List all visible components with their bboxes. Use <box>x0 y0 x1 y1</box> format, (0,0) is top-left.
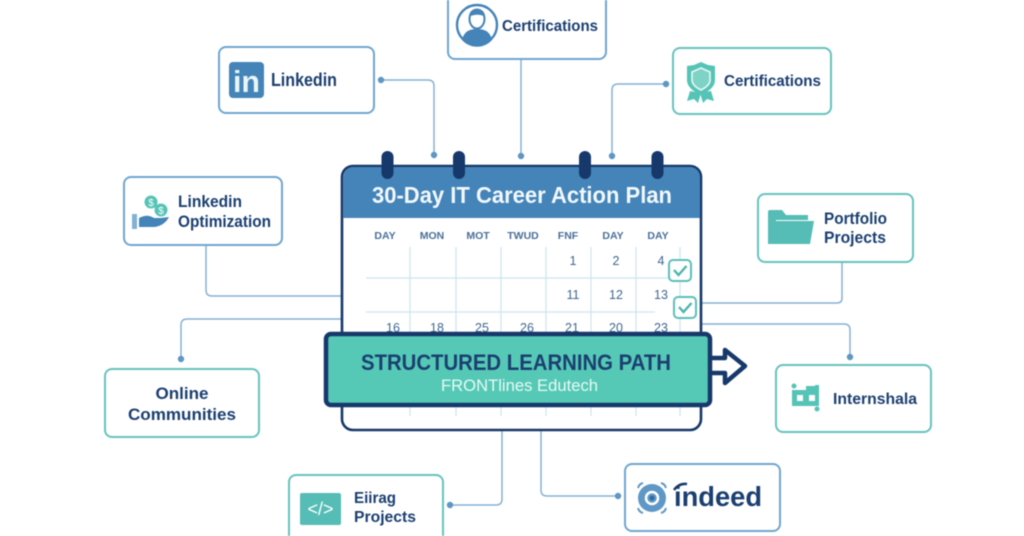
icon: internshala logo <box>792 384 820 412</box>
card: portfolio projects <box>758 194 913 262</box>
card: linkedin <box>219 47 374 113</box>
checkbox 2 <box>674 297 696 318</box>
banner subheading: FRONTlines Edutech <box>441 376 598 395</box>
banner arrow <box>708 350 745 383</box>
date numbers: 20 <box>609 321 623 335</box>
weekday labels: DAY <box>602 230 624 242</box>
card: projects <box>289 475 443 536</box>
label: Certifications <box>502 18 598 35</box>
date numbers: 11 <box>567 288 580 302</box>
label: Projects <box>354 509 416 526</box>
connector: top certifications to calendar <box>518 59 524 159</box>
date numbers: 16 <box>386 321 400 335</box>
icon: folder <box>768 210 814 244</box>
connector: projects to calendar <box>447 430 502 508</box>
connector: portfolio projects to calendar <box>700 262 842 303</box>
weekday labels: TWUD <box>507 230 539 242</box>
checkbox 1 <box>669 260 691 281</box>
weekday labels <box>374 230 669 242</box>
label: Linkedin <box>271 70 337 90</box>
card: right certifications <box>673 48 831 114</box>
card: linkedin optimization <box>124 177 282 245</box>
icon: code brackets: </> <box>307 499 334 519</box>
date numbers: 25 <box>475 321 489 335</box>
icon: person in circle <box>457 5 497 47</box>
date numbers: 1 <box>570 254 577 268</box>
connector: right certifications to calendar <box>609 81 669 159</box>
icon: hand with coins: $ <box>148 198 154 209</box>
weekday labels: DAY <box>647 230 669 242</box>
card: indeed <box>625 464 780 531</box>
weekday labels: FNF <box>558 230 579 242</box>
label: Portfolio <box>824 210 887 228</box>
banner: structured learning path <box>326 334 745 405</box>
icon: linkedin logo: in <box>233 64 260 99</box>
icon: hand with coins <box>132 196 169 229</box>
card: internshala <box>776 365 931 432</box>
icon: indeed arc <box>674 484 687 490</box>
date numbers: 21 <box>565 321 579 335</box>
date numbers: 12 <box>609 288 623 302</box>
label: Linkedin <box>178 193 242 211</box>
date numbers: 13 <box>654 288 668 302</box>
label: indeed <box>674 481 762 512</box>
icon: award badge <box>687 62 715 103</box>
date numbers: 18 <box>430 321 444 335</box>
calendar header <box>344 167 700 218</box>
calendar <box>342 151 701 430</box>
date numbers: 4 <box>658 254 665 268</box>
calendar title: 30-Day IT Career Action Plan <box>372 182 672 208</box>
icon: indeed logo <box>638 483 666 513</box>
label: Certifications <box>724 73 821 90</box>
weekday labels: MOT <box>466 230 490 242</box>
label: Projects <box>824 229 886 247</box>
date numbers <box>386 254 668 335</box>
calendar grid <box>366 247 680 416</box>
card: online communities <box>105 369 259 437</box>
card: top certifications <box>448 0 606 59</box>
binder rings <box>382 151 664 179</box>
icon: code brackets <box>300 493 341 525</box>
label: Internshala <box>833 391 917 408</box>
icon: hand with coins: $ <box>158 206 164 217</box>
label: Optimization <box>178 213 271 231</box>
weekday labels: MON <box>420 230 444 242</box>
banner body <box>326 334 710 405</box>
banner heading: STRUCTURED LEARNING PATH <box>361 350 671 375</box>
connector: internshala to calendar <box>700 324 853 360</box>
connector: linkedin optimization to calendar <box>206 245 342 296</box>
label: Communities <box>128 405 236 424</box>
date numbers: 23 <box>654 321 668 335</box>
date numbers: 2 <box>613 254 620 268</box>
label: Online <box>156 384 208 403</box>
connector: online communities to calendar <box>178 319 342 362</box>
connector: indeed to calendar <box>541 430 621 499</box>
label: Eiirag <box>354 490 396 507</box>
connector: linkedin to calendar <box>378 77 437 158</box>
weekday labels: DAY <box>374 230 396 242</box>
date numbers: 26 <box>520 321 534 335</box>
